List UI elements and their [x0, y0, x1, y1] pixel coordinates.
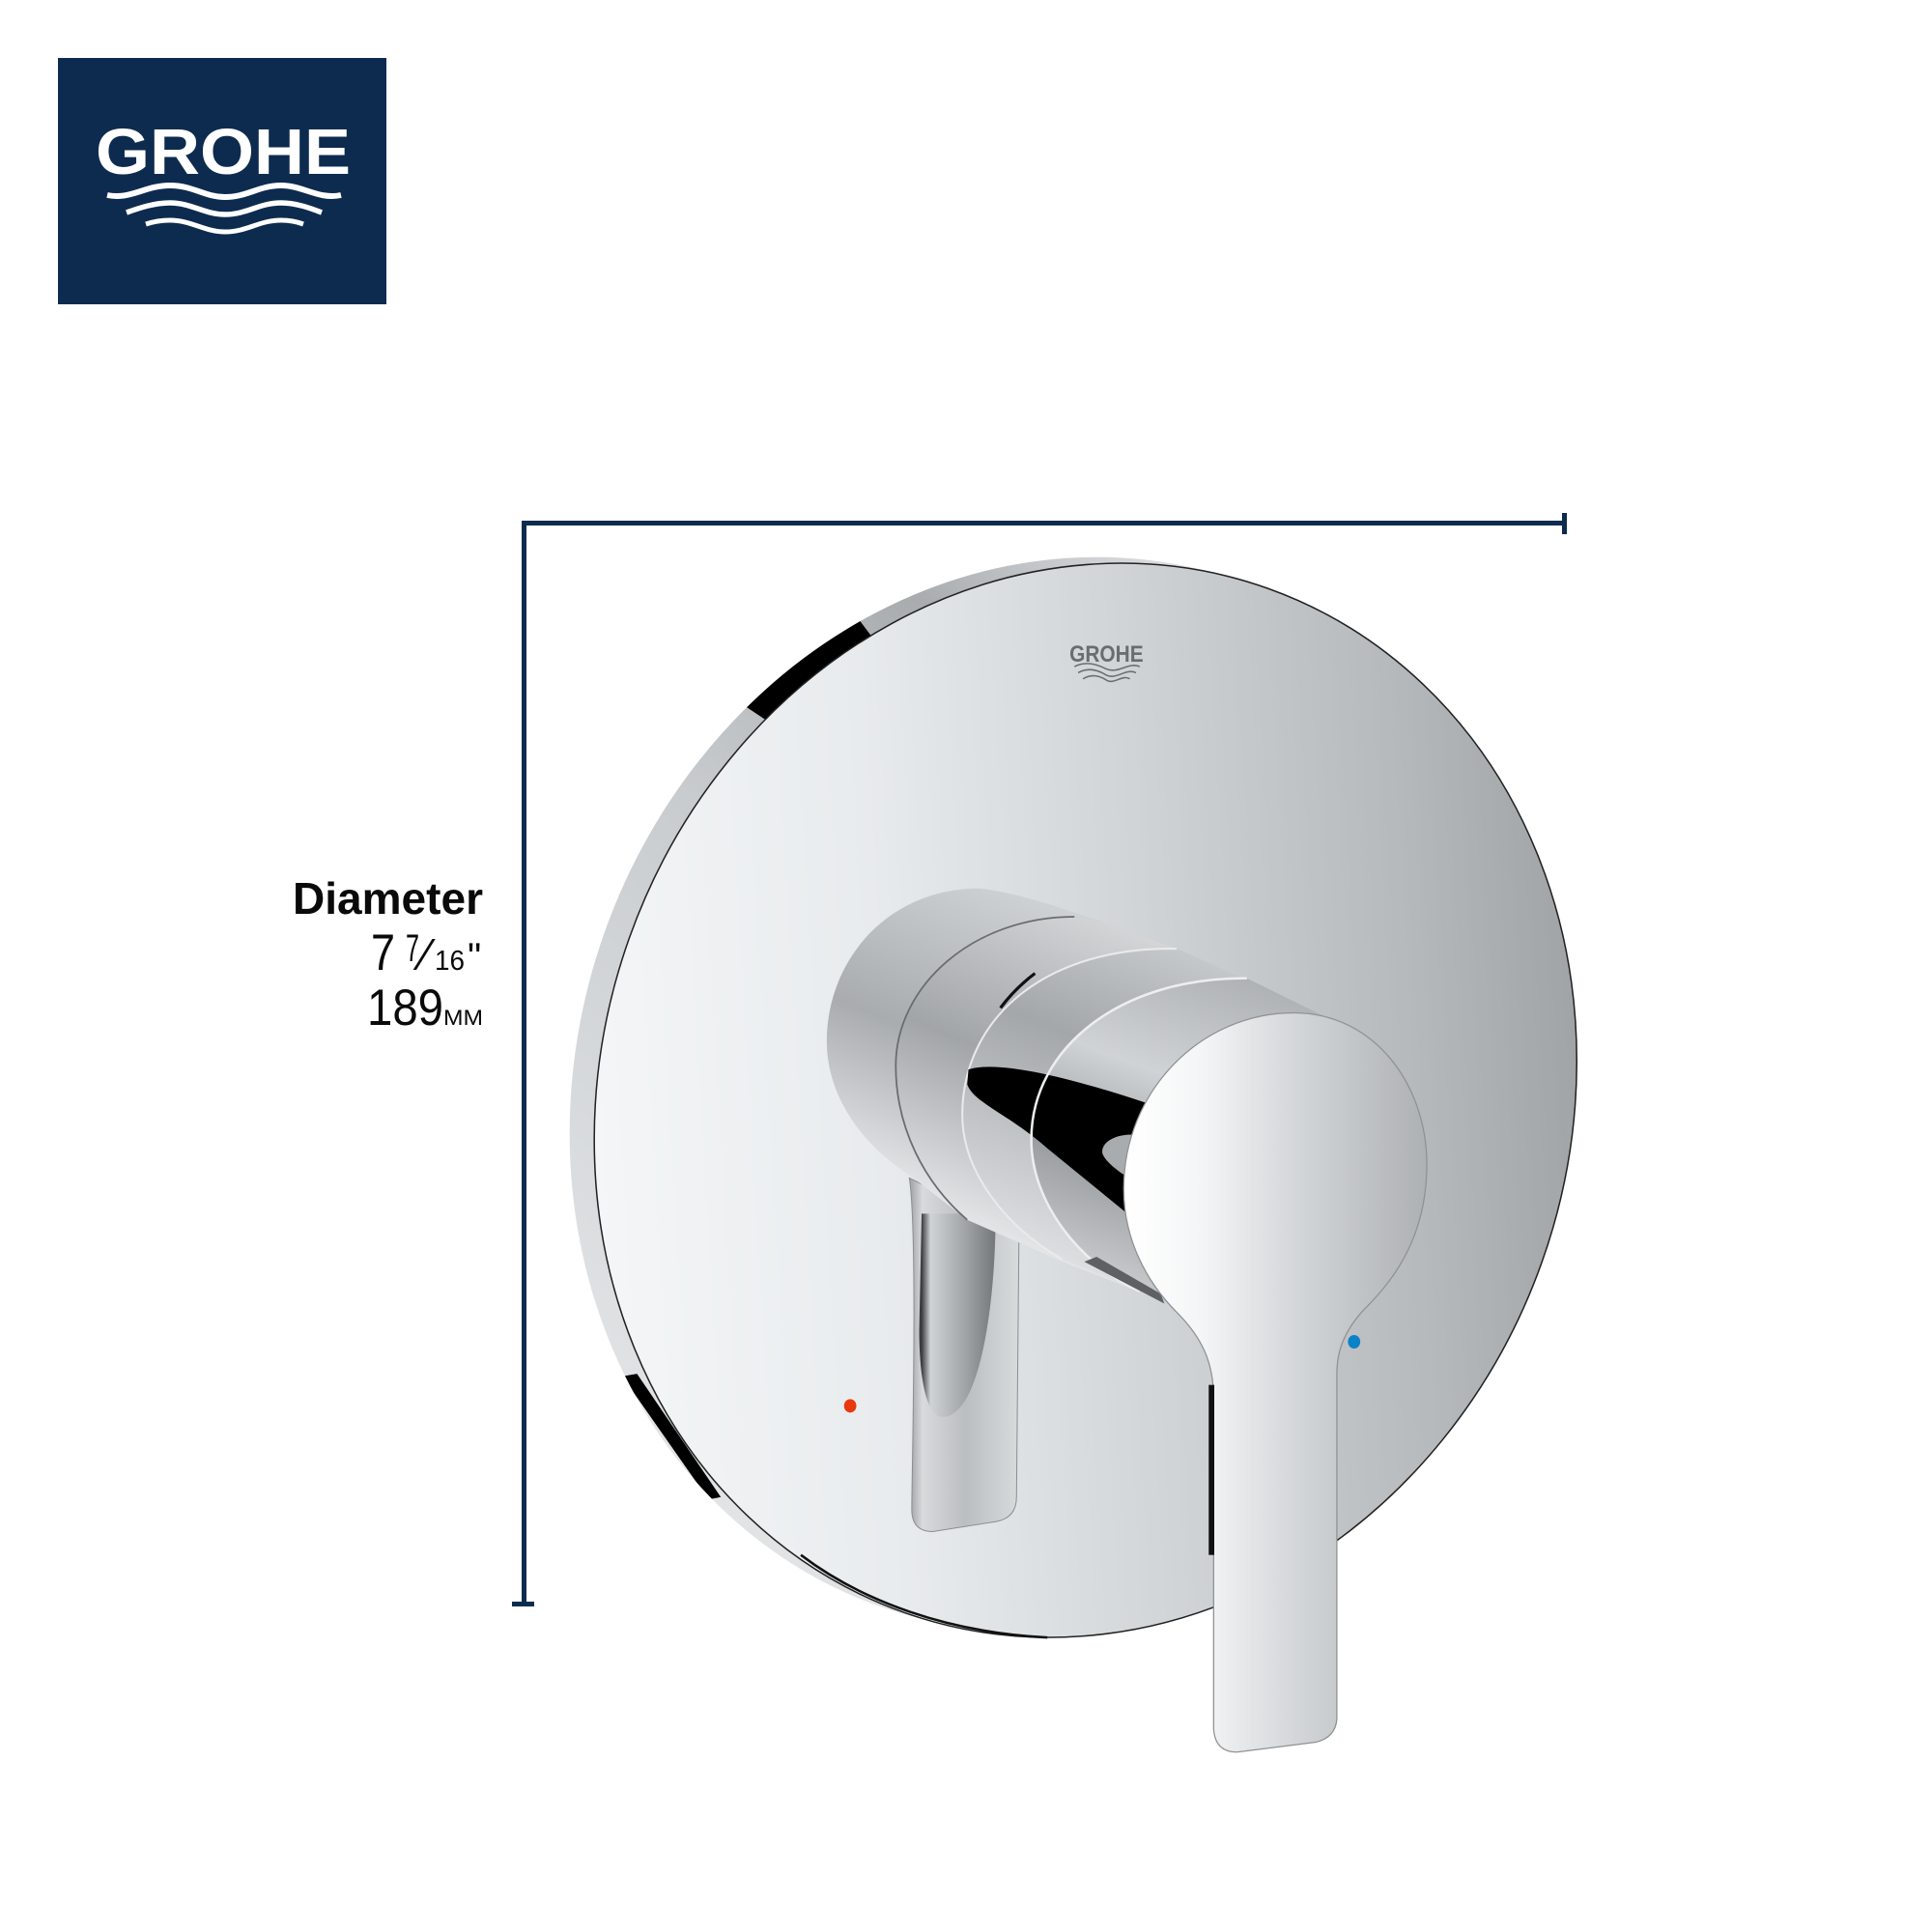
cylinder ring 1 [827, 889, 1324, 1303]
lever handle [1123, 1012, 1427, 1752]
disc bottom edge shadow [801, 1555, 1047, 1637]
hot indicator [844, 1399, 856, 1412]
ring 3 edge [962, 949, 1177, 1260]
lever shadow [1208, 1385, 1214, 1555]
logo: GROHE: GROHE [96, 116, 351, 188]
label: Diameter: ⁄ [412, 929, 436, 980]
dimension line: height [512, 521, 534, 1606]
cylinder ring 3 [962, 949, 1324, 1303]
cylinder body [827, 889, 1324, 1303]
disc face [447, 426, 1724, 1775]
lower escutcheon plate [909, 1178, 1019, 1531]
label: Diameter: MM [443, 1006, 483, 1030]
underside shadow [1084, 1257, 1164, 1303]
logo waves [107, 185, 341, 232]
engraved logo [1069, 641, 1144, 681]
cold indicator [1348, 1335, 1360, 1349]
product: shower valve trim [570, 556, 1577, 1752]
disc rim [570, 556, 1202, 1618]
label: Diameter [293, 873, 483, 1037]
ring accent [1001, 974, 1035, 1008]
engraved logo: GROHE [1069, 641, 1144, 668]
logo: GROHE [58, 58, 386, 304]
label: Diameter: 7 [406, 927, 419, 970]
ring edge highlight [1032, 979, 1247, 1292]
label: Diameter: 189 [367, 980, 443, 1037]
ring 2 edge [895, 917, 1074, 1220]
label: Diameter: Diameter [293, 873, 483, 923]
reflection highlight [1102, 1135, 1133, 1178]
dimension line: width [522, 513, 1567, 534]
label: Diameter: " [468, 936, 481, 979]
label: Diameter: 16 [435, 946, 465, 977]
cylinder ring 4 [1032, 979, 1324, 1303]
label: Diameter: 7 [371, 924, 395, 981]
cylinder ring 2 [895, 917, 1324, 1303]
black reflection [967, 1066, 1146, 1213]
